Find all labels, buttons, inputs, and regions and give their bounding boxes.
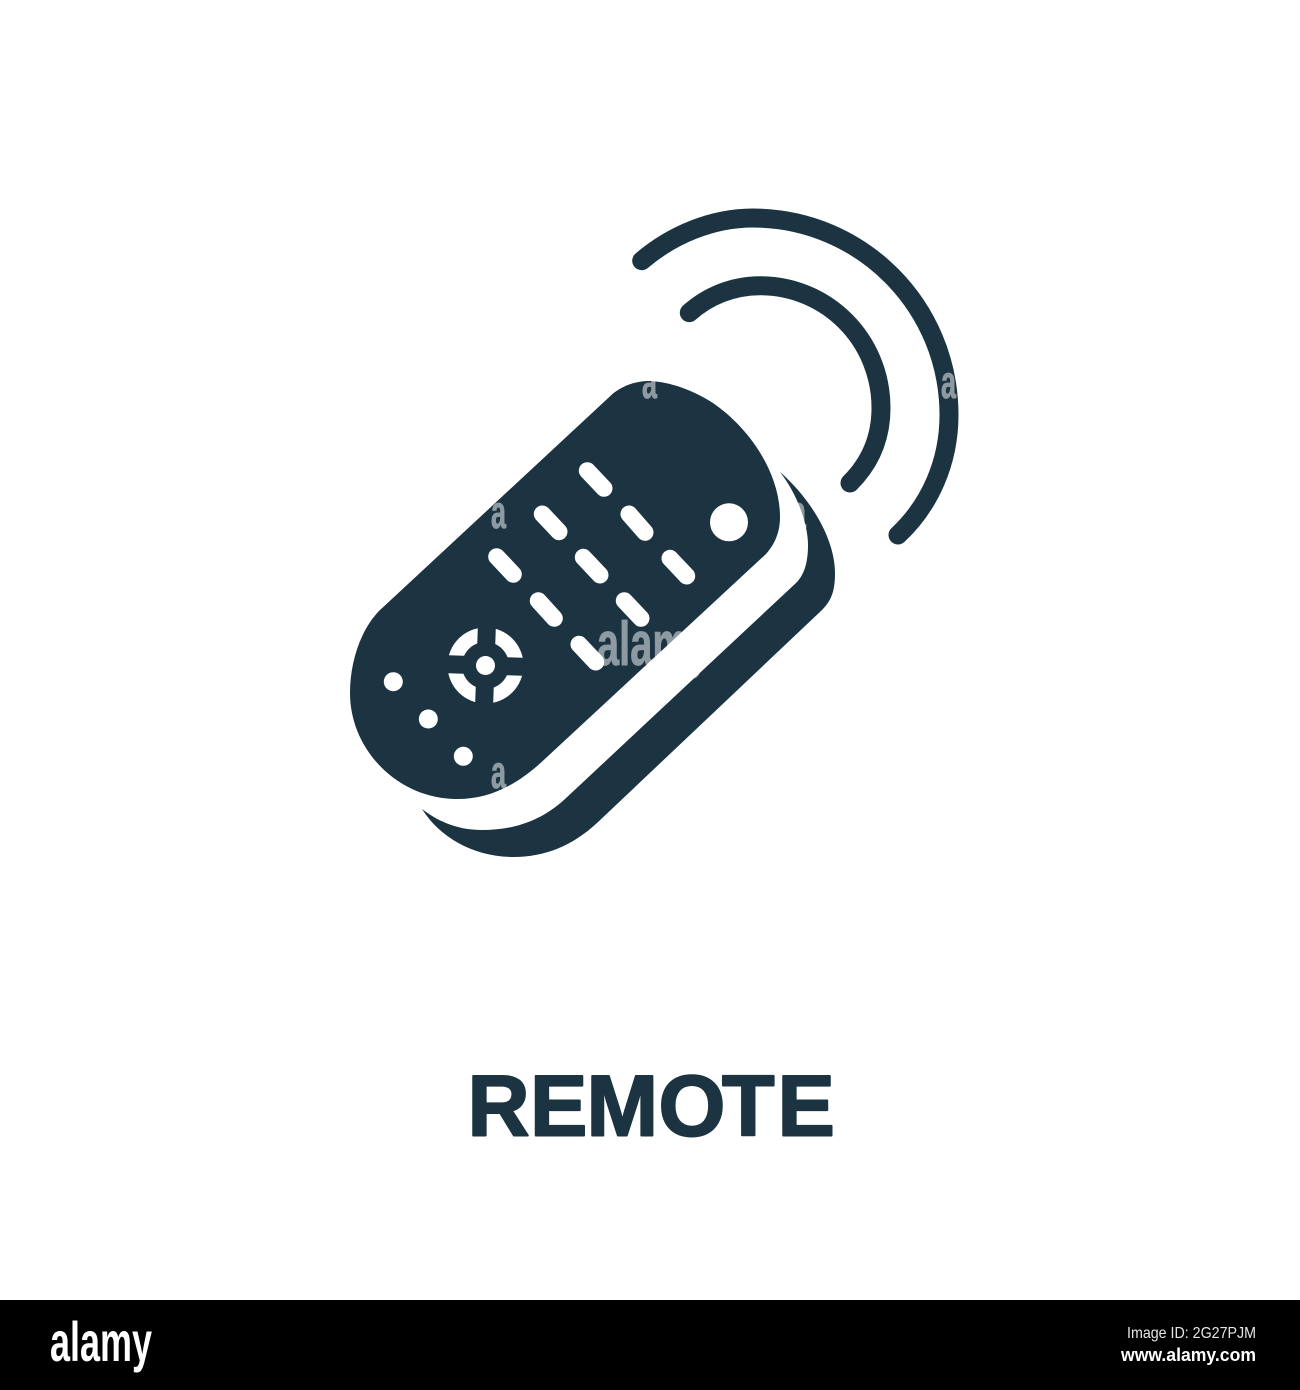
icon: power button: [710, 503, 748, 541]
icon: remote shadow edge: [422, 472, 835, 857]
icon: directional pad: [441, 621, 530, 710]
icon: inner signal wave: [689, 286, 881, 483]
icon: outer signal wave: [642, 218, 949, 535]
watermark fragments: [491, 356, 956, 798]
watermark fragments: a: [791, 486, 806, 538]
watermark fragments: a: [491, 746, 506, 798]
icon: keypad buttons: [497, 471, 687, 662]
watermark fragments: a: [491, 486, 506, 538]
website address: www.alamy.com: [1120, 1345, 1256, 1365]
image id: Image ID: 2G27PJM: [1127, 1325, 1256, 1342]
footer logo: alamy: [50, 1310, 152, 1373]
icon: remote control with signal waves: [350, 218, 949, 857]
icon: remote body: [350, 381, 780, 799]
title: REMOTE: [468, 1058, 835, 1154]
footer bar: [0, 1300, 1300, 1390]
icon: small round buttons: [384, 672, 473, 766]
watermark fragments: a: [642, 356, 657, 408]
watermark fragments: alamy: [597, 610, 710, 679]
watermark fragments: a: [941, 356, 956, 408]
